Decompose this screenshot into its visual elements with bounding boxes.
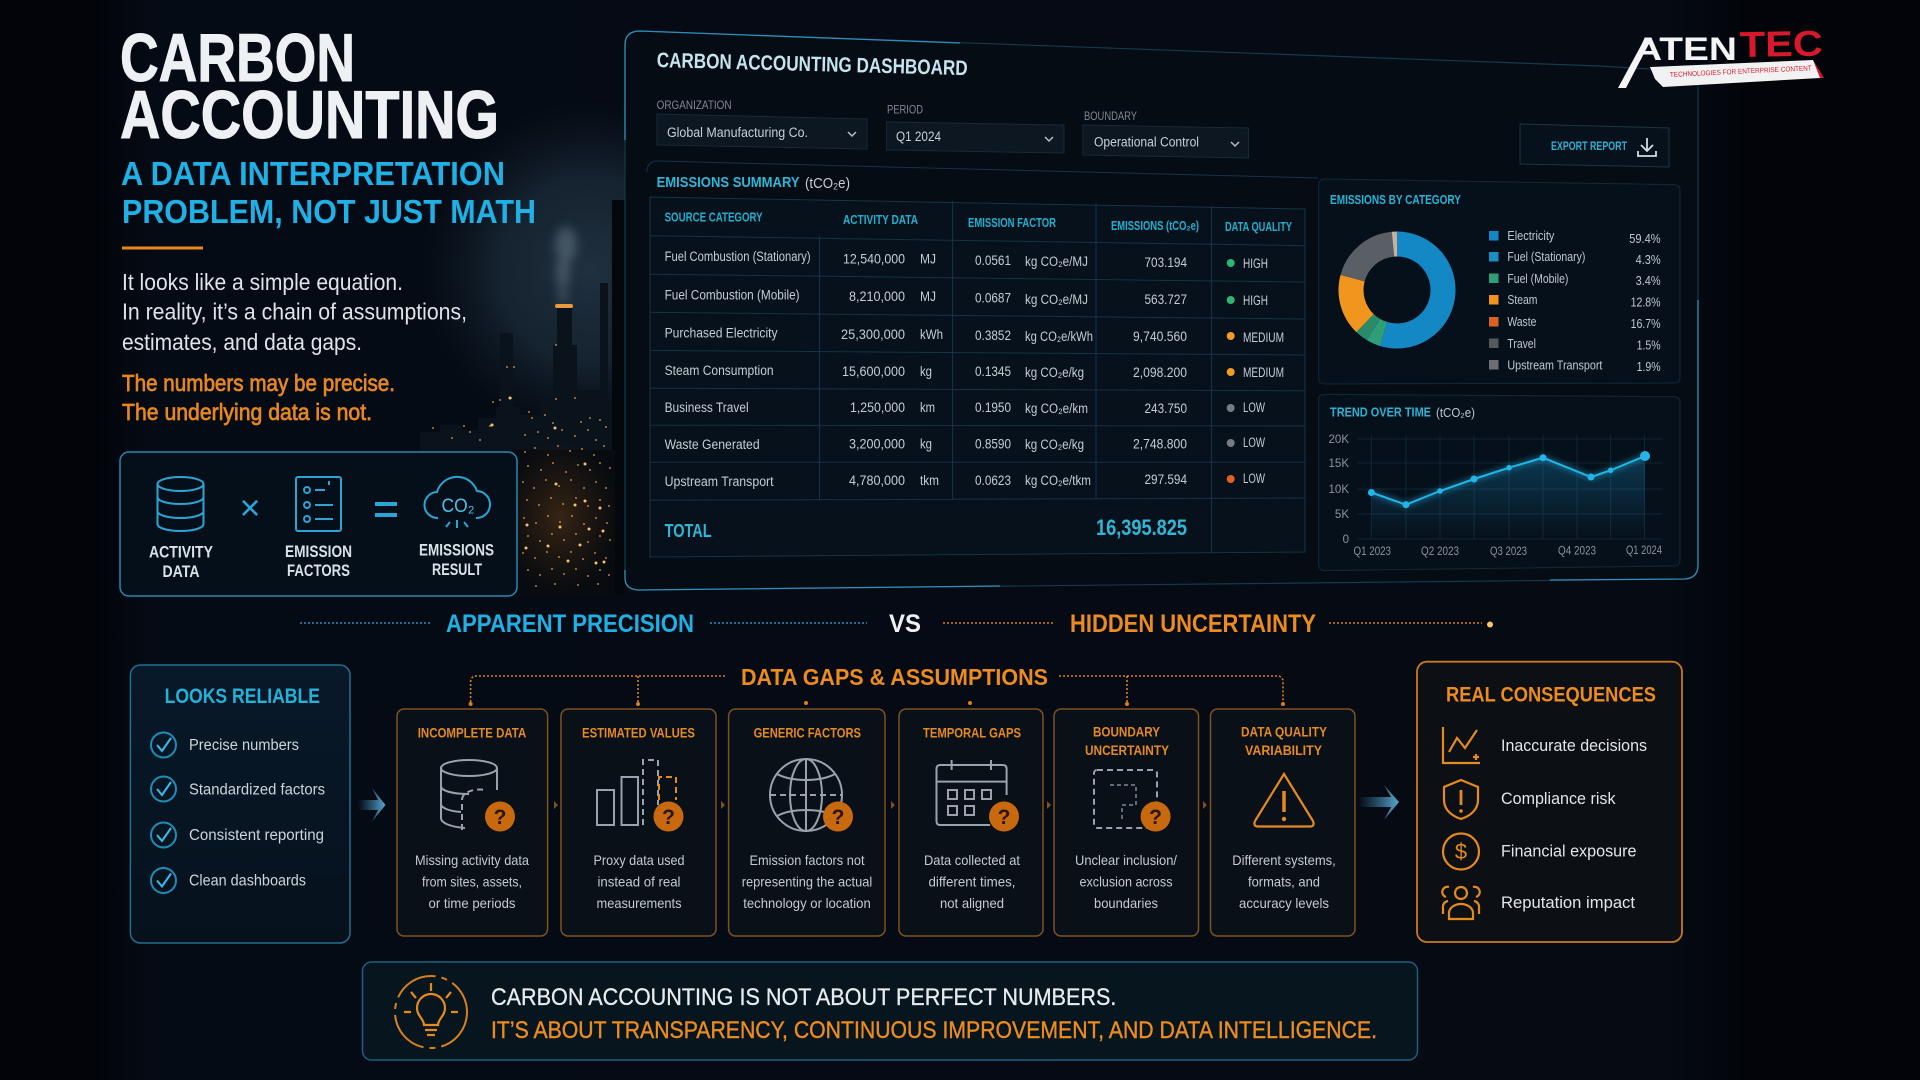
line chart: 20K	[1329, 434, 1349, 446]
card description: instead of real	[598, 873, 680, 889]
card description: Emission factors not	[750, 852, 865, 868]
equals sign	[375, 502, 397, 517]
row: fuel combustion mobile: kg CO₂e/MJ	[1025, 292, 1088, 307]
comparison heading: apparent precision vs hidden uncertainty: APPARENT PRECISION	[446, 610, 694, 638]
subtitle	[121, 155, 536, 230]
row: business travel: LOW	[1243, 400, 1265, 415]
card description: technology or location	[743, 895, 871, 911]
dashboard heading: CARBON ACCOUNTING DASHBOARD	[656, 49, 968, 80]
subtitle: A DATA INTERPRETATION	[121, 155, 505, 192]
filter: boundary	[1083, 109, 1248, 158]
row: business travel: Business Travel	[665, 400, 749, 415]
label: emissions result	[419, 540, 494, 579]
card: generic factors: GENERIC FACTORS	[754, 725, 861, 741]
card description: not aligned	[940, 895, 1004, 911]
card: incomplete data	[397, 709, 548, 936]
multiply sign: ×	[239, 487, 261, 528]
icon: CO2 cloud: CO₂	[442, 496, 474, 517]
row: fuel combustion stationary: MJ	[920, 252, 936, 266]
emissions summary heading: (tCO₂e)	[805, 175, 850, 192]
row: business travel: 243.750	[1144, 401, 1187, 416]
emissions summary heading: EMISSIONS SUMMARY	[657, 174, 800, 191]
panel: real consequences	[1417, 662, 1682, 942]
panel: equation	[120, 452, 517, 596]
label: emission factors: FACTORS	[287, 561, 350, 580]
card: data quality variability	[1210, 709, 1355, 936]
row: fuel combustion stationary: Fuel Combustion (Stationary)	[665, 249, 811, 264]
row: fuel combustion stationary: HIGH	[1243, 256, 1268, 271]
icon: lightbulb	[395, 976, 467, 1048]
donut legend: 12.8%	[1631, 294, 1661, 310]
item: consistent reporting: Consistent reporting	[189, 827, 324, 844]
donut legend	[1489, 228, 1661, 374]
comparison heading: apparent precision vs hidden uncertainty	[300, 610, 1493, 638]
row: fuel combustion mobile	[665, 287, 1268, 308]
logo: Atentec: TEC	[1739, 23, 1823, 65]
row: purchased electricity	[665, 326, 1284, 345]
row: fuel combustion mobile: 0.0687	[975, 291, 1011, 306]
row: steam consumption: kg	[920, 364, 932, 379]
donut legend: 1.5%	[1637, 338, 1661, 352]
row: waste generated: kg	[920, 436, 932, 452]
row: fuel combustion stationary	[665, 249, 1268, 271]
orange statement	[122, 370, 395, 425]
line chart: 5K	[1335, 509, 1349, 521]
row: fuel combustion stationary: 12,540,000	[843, 252, 905, 266]
row: steam consumption: 0.1345	[975, 364, 1011, 379]
filter: organization: ORGANIZATION	[657, 98, 732, 112]
table header: DATA QUALITY	[1225, 220, 1292, 234]
card description: representing the actual	[742, 873, 872, 889]
item: standardized factors	[151, 776, 325, 802]
row: steam consumption: MEDIUM	[1243, 365, 1284, 380]
row: business travel: km	[920, 400, 935, 415]
item: financial exposure: Financial exposure	[1501, 842, 1636, 860]
takeaway text: CARBON ACCOUNTING IS NOT ABOUT PERFECT NUMBERS.	[491, 984, 1116, 1011]
heading: data gaps and assumptions: DATA GAPS & ASSUMPTIONS	[741, 664, 1048, 690]
orange statement: The underlying data is not.	[122, 399, 372, 425]
filter: boundary: BOUNDARY	[1084, 109, 1137, 123]
trend heading: TREND OVER TIME	[1330, 405, 1431, 420]
item: standardized factors: Standardized factors	[189, 782, 325, 798]
donut legend: 59.4%	[1629, 231, 1661, 246]
card: boundary uncertainty: UNCERTAINTY	[1085, 742, 1170, 758]
panel: emissions summary	[647, 161, 1318, 557]
logo: Atentec: TECHNOLOGIES FOR ENTERPRISE CONTENT	[1670, 65, 1813, 79]
donut legend: Electricity	[1507, 228, 1555, 243]
panel: dashboard	[625, 31, 1698, 590]
card: estimated values	[561, 709, 716, 936]
filter: period: PERIOD	[887, 103, 923, 117]
heading: data gaps and assumptions	[469, 664, 1285, 706]
card description: exclusion across	[1080, 873, 1172, 889]
card: estimated values: ESTIMATED VALUES	[582, 725, 695, 741]
donut legend: 3.4%	[1636, 273, 1661, 288]
icon: activity data database	[158, 477, 204, 531]
label: activity data	[149, 542, 214, 581]
item: reputation impact	[1442, 887, 1635, 919]
arrow: reliable to gaps	[358, 788, 386, 822]
total row	[665, 515, 1187, 541]
item: precise numbers	[151, 732, 299, 758]
intro text: It looks like a simple equation.	[122, 269, 403, 295]
category heading: EMISSIONS BY CATEGORY	[1330, 193, 1462, 207]
banner: key takeaway	[362, 962, 1418, 1060]
row: steam consumption	[665, 363, 1284, 380]
icon: bars with question mark	[597, 760, 684, 832]
card description	[594, 852, 684, 911]
intro text: In reality, it’s a chain of assumptions,	[122, 298, 467, 324]
line chart: Q1 2023	[1354, 546, 1391, 558]
row: steam consumption: 15,600,000	[842, 364, 905, 379]
row: fuel combustion mobile: Fuel Combustion (Mobile)	[665, 287, 800, 302]
row: upstream transport: tkm	[920, 473, 939, 488]
row: upstream transport: Upstream Transport	[665, 474, 774, 489]
row: fuel combustion mobile: HIGH	[1243, 293, 1268, 308]
panel: trend over time	[1319, 394, 1680, 571]
row: fuel combustion stationary: 0.0561	[975, 253, 1011, 268]
icon: warning triangle	[1254, 774, 1314, 826]
row: upstream transport	[665, 471, 1265, 489]
table header: SOURCE CATEGORY	[665, 211, 763, 225]
total row: 16,395.825	[1096, 515, 1187, 540]
donut legend: Travel	[1507, 336, 1536, 351]
orange statement: The numbers may be precise.	[122, 370, 395, 396]
row: purchased electricity: 0.3852	[975, 328, 1011, 343]
donut legend: 16.7%	[1631, 316, 1661, 331]
icon: emission factors document	[296, 477, 341, 531]
card: boundary uncertainty	[1054, 709, 1198, 936]
donut legend: Upstream Transport	[1507, 358, 1603, 372]
label: emissions result: RESULT	[432, 560, 482, 579]
row: waste generated: Waste Generated	[665, 437, 760, 452]
row: steam consumption: kg CO₂e/kg	[1025, 365, 1084, 380]
item: compliance risk: Compliance risk	[1501, 789, 1616, 808]
panel: looks reliable	[130, 665, 350, 943]
comparison heading: apparent precision vs hidden uncertainty: VS	[889, 610, 921, 638]
card description: Data collected at	[924, 852, 1020, 868]
icon: dashed boundary with question mark	[1094, 770, 1171, 832]
card description: different times,	[928, 873, 1016, 889]
line chart: Q2 2023	[1421, 546, 1459, 558]
row: fuel combustion stationary: kg CO₂e/MJ	[1025, 254, 1088, 269]
card description	[742, 852, 872, 911]
row: waste generated: 2,748.800	[1133, 436, 1187, 452]
row: business travel: 1,250,000	[850, 400, 905, 415]
card description: Different systems,	[1232, 852, 1336, 868]
export report button: EXPORT REPORT	[1551, 139, 1627, 153]
donut legend: Waste	[1507, 314, 1536, 329]
row: purchased electricity: kWh	[920, 327, 943, 342]
title	[120, 20, 499, 153]
row: purchased electricity: MEDIUM	[1243, 330, 1284, 345]
table header	[665, 211, 1292, 234]
donut legend: 1.9%	[1637, 359, 1661, 374]
icon: dashed boundary with question mark: ?	[1149, 806, 1162, 829]
table header: ACTIVITY DATA	[843, 213, 918, 227]
subtitle: PROBLEM, NOT JUST MATH	[122, 193, 536, 230]
item: consistent reporting	[151, 822, 324, 848]
donut chart	[1351, 244, 1443, 336]
card description: Unclear inclusion/	[1075, 852, 1177, 868]
row: purchased electricity: 25,300,000	[841, 327, 905, 342]
card description	[415, 852, 529, 911]
icon: database with question mark: ?	[494, 806, 506, 829]
item: compliance risk	[1444, 780, 1616, 819]
filter: period	[886, 103, 1064, 153]
item: precise numbers: Precise numbers	[189, 737, 299, 754]
donut legend: Fuel (Mobile)	[1507, 271, 1568, 286]
item: inaccurate decisions	[1443, 727, 1647, 763]
row: upstream transport: kg CO₂e/tkm	[1025, 473, 1091, 488]
label: emission factors: EMISSION	[285, 542, 352, 561]
looks reliable heading: LOOKS RELIABLE	[165, 685, 320, 708]
filter: organization	[657, 98, 867, 149]
card description	[1075, 852, 1177, 911]
line chart: Q3 2023	[1490, 546, 1527, 558]
background: refinery at night	[420, 100, 625, 595]
label: emissions result: EMISSIONS	[419, 540, 494, 560]
item: clean dashboards: Clean dashboards	[189, 872, 306, 890]
intro text: estimates, and data gaps.	[122, 329, 362, 355]
row: waste generated: kg CO₂e/kg	[1025, 437, 1084, 452]
logo: Atentec	[1618, 23, 1824, 88]
card: data quality variability: DATA QUALITY	[1241, 724, 1328, 740]
icon: CO2 cloud	[424, 477, 490, 528]
card: incomplete data: INCOMPLETE DATA	[418, 725, 526, 741]
row: steam consumption: Steam Consumption	[665, 363, 774, 378]
label: emission factors	[285, 542, 352, 580]
line chart	[1329, 434, 1662, 558]
card description: measurements	[596, 895, 682, 911]
line chart: 15K	[1329, 458, 1349, 470]
card description	[924, 852, 1020, 911]
intro text	[122, 269, 467, 355]
row: waste generated: 0.8590	[975, 436, 1011, 452]
filter: organization: Global Manufacturing Co.	[667, 125, 808, 140]
trend heading: (tCO₂e)	[1436, 405, 1475, 420]
row: upstream transport: LOW	[1243, 471, 1265, 486]
row: fuel combustion stationary: 703.194	[1144, 255, 1187, 270]
row: fuel combustion mobile: MJ	[920, 289, 936, 304]
total row: TOTAL	[665, 521, 712, 541]
icon: calendar with question mark: ?	[998, 806, 1010, 829]
row: fuel combustion mobile: 8,210,000	[849, 289, 905, 304]
panel: emissions by category	[1319, 179, 1680, 384]
arrow: gaps to consequences	[1358, 785, 1399, 820]
row: steam consumption: 2,098.200	[1133, 365, 1187, 380]
row: business travel: kg CO₂e/km	[1025, 401, 1088, 416]
arrows between cards	[554, 801, 1207, 809]
title: ACCOUNTING	[120, 77, 499, 153]
export report button	[1520, 124, 1669, 167]
item: inaccurate decisions: Inaccurate decisions	[1501, 736, 1647, 755]
row: fuel combustion mobile: 563.727	[1144, 292, 1187, 307]
icon: globe with question mark	[770, 759, 853, 832]
item: financial exposure	[1443, 834, 1636, 870]
row: purchased electricity: Purchased Electricity	[665, 326, 778, 340]
label: activity data: ACTIVITY	[149, 542, 214, 562]
title: CARBON	[120, 20, 355, 96]
filter: period: Q1 2024	[896, 129, 941, 144]
comparison heading: apparent precision vs hidden uncertainty: HIDDEN UNCERTAINTY	[1070, 610, 1316, 638]
card: temporal gaps	[899, 709, 1043, 936]
card description: from sites, assets,	[422, 873, 522, 889]
card: boundary uncertainty: BOUNDARY	[1093, 724, 1161, 740]
row: upstream transport: 0.0623	[975, 473, 1011, 488]
row: waste generated: 3,200,000	[849, 436, 905, 452]
item: financial exposure: $	[1455, 839, 1467, 864]
donut legend: Steam	[1507, 292, 1537, 307]
card: generic factors	[729, 709, 885, 936]
table header: EMISSION FACTOR	[968, 216, 1056, 230]
donut legend: Fuel (Stationary)	[1507, 249, 1585, 264]
row: upstream transport: 4,780,000	[849, 473, 905, 488]
row: purchased electricity: 9,740.560	[1133, 329, 1187, 344]
takeaway text: IT’S ABOUT TRANSPARENCY, CONTINUOUS IMPROVEMENT, AND DATA INTELLIGENCE.	[491, 1017, 1377, 1044]
item: clean dashboards	[151, 868, 306, 893]
card description: boundaries	[1094, 895, 1158, 911]
emissions table	[650, 197, 1305, 557]
icon: calendar with question mark	[936, 760, 1019, 832]
card description: Missing activity data	[415, 852, 529, 868]
icon: database with question mark	[441, 760, 515, 832]
line chart: Q1 2024	[1626, 545, 1662, 557]
row: purchased electricity: kg CO₂e/kWh	[1025, 329, 1093, 344]
filter: boundary: Operational Control	[1094, 134, 1199, 150]
label: activity data: DATA	[162, 562, 200, 581]
row: waste generated	[665, 435, 1265, 452]
row: business travel	[665, 400, 1265, 416]
card description: formats, and	[1248, 873, 1320, 889]
line chart: Q4 2023	[1558, 546, 1596, 558]
row: waste generated: LOW	[1243, 435, 1265, 450]
table header: EMISSIONS (tCO₂e)	[1111, 219, 1199, 233]
card description: or time periods	[428, 895, 516, 911]
line chart: 10K	[1329, 484, 1349, 496]
logo: Atentec: ATEN	[1634, 31, 1737, 67]
consequences heading: REAL CONSEQUENCES	[1446, 683, 1656, 707]
takeaway text	[491, 984, 1377, 1044]
card: temporal gaps: TEMPORAL GAPS	[923, 725, 1021, 741]
row: upstream transport: 297.594	[1144, 472, 1187, 487]
item: reputation impact: Reputation impact	[1501, 893, 1635, 912]
icon: bars with question mark: ?	[662, 806, 675, 829]
card description: accuracy levels	[1239, 895, 1329, 911]
donut legend: 4.3%	[1636, 252, 1661, 267]
card description	[1232, 852, 1336, 911]
card: data quality variability: VARIABILITY	[1245, 742, 1323, 758]
line chart: 0	[1343, 534, 1349, 546]
row: business travel: 0.1950	[975, 400, 1011, 415]
card description: Proxy data used	[594, 852, 684, 868]
icon: globe with question mark: ?	[832, 806, 844, 829]
